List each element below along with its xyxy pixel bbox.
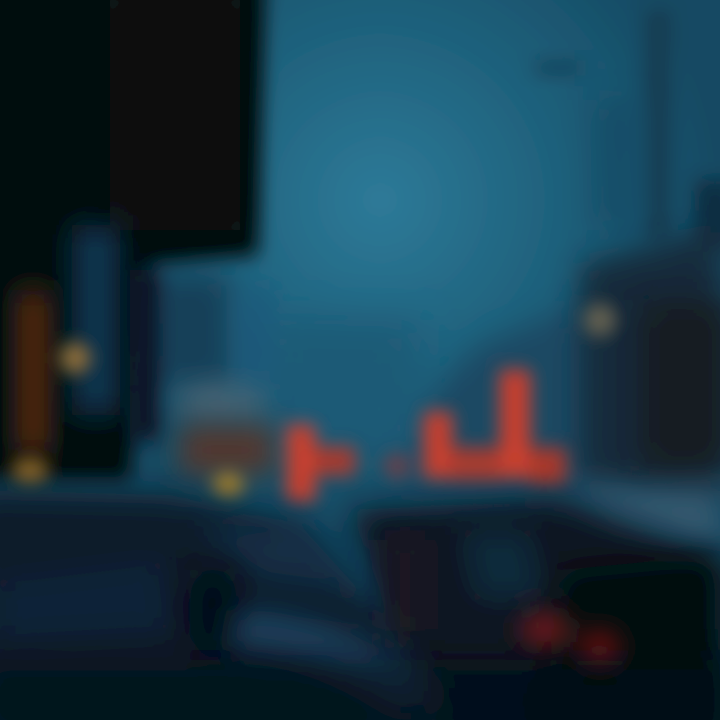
background: far buildings in haze xyxy=(260,300,620,490)
road: pale haze on right xyxy=(560,485,720,550)
street stall: canopy and warm lights xyxy=(172,384,275,497)
overlay: bottom vignette xyxy=(0,660,720,720)
building: dark block on right xyxy=(580,230,720,500)
building: dark block on upper left xyxy=(0,0,265,480)
lights: red tail lights in foreground xyxy=(521,615,618,668)
storefront: orange glow on left xyxy=(12,290,90,485)
building: tower and wires on upper right xyxy=(535,10,720,250)
storefront: blue glow on left xyxy=(72,225,270,440)
foreground: dark cars xyxy=(0,490,720,720)
lights: red signs in the distance xyxy=(287,370,566,501)
